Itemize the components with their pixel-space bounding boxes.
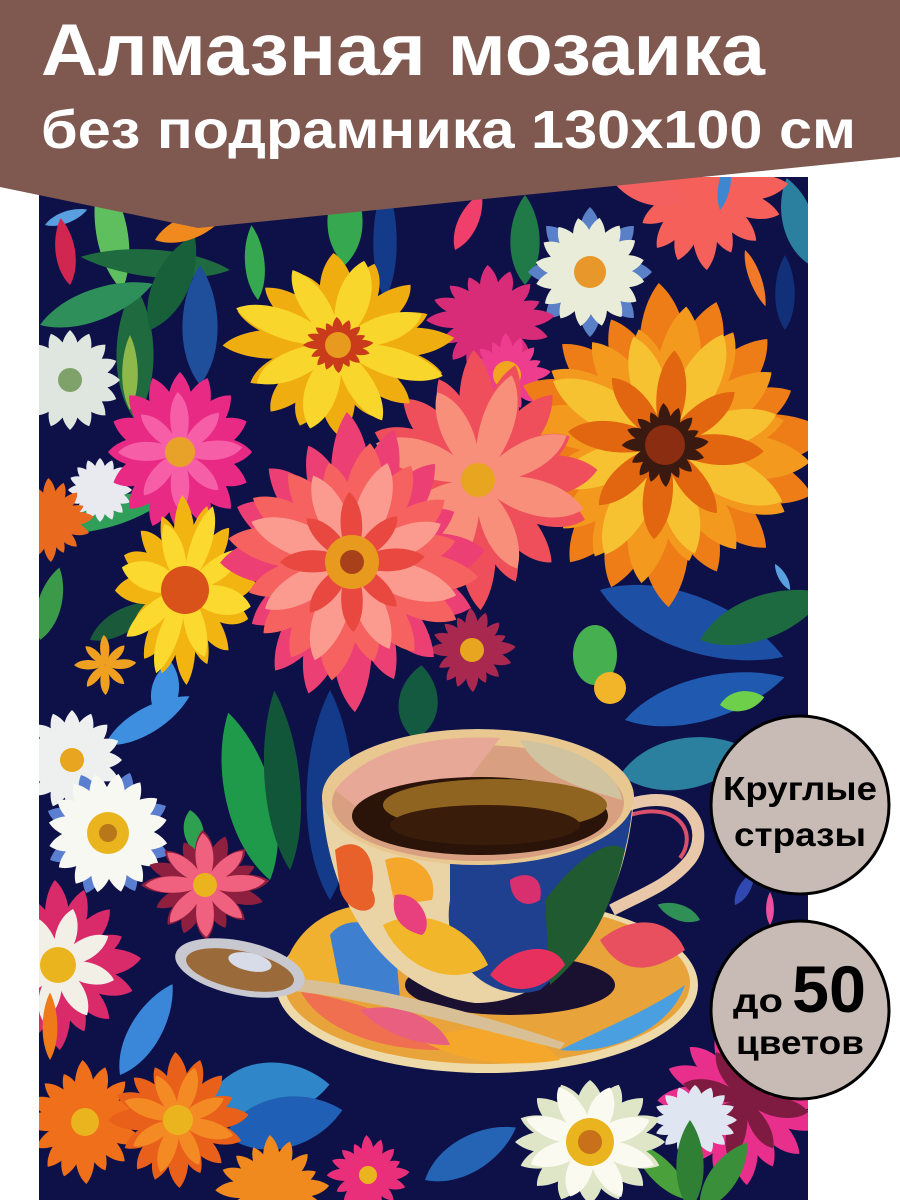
flower: magenta behind — [426, 265, 554, 362]
flower: big orange right — [523, 283, 808, 608]
flower: white top — [528, 207, 652, 337]
cup handle — [612, 800, 698, 910]
flower: white small — [68, 458, 132, 522]
cup rim — [322, 729, 634, 865]
flower: orange lower — [215, 1135, 329, 1200]
flower: white daisy with blue shading — [48, 772, 167, 894]
painting: flowers and coffee cup — [39, 177, 808, 1200]
badge: round rhinestones: Круглые — [723, 770, 877, 807]
cup body — [322, 795, 634, 1003]
saucer — [276, 897, 698, 1073]
flower: pink right bottom — [658, 1040, 808, 1185]
flower: coral top right — [616, 177, 788, 306]
flower: dark pink small — [432, 608, 516, 692]
subtitle: без подрамника 130х100 см — [41, 100, 856, 160]
flower: pink left — [108, 372, 252, 526]
flower: orange left edge — [39, 478, 94, 562]
flower: orange small left — [74, 635, 136, 695]
flower: left edge white pink — [39, 880, 141, 1060]
green leaves at bottom right — [644, 1120, 748, 1200]
flower: white large bottom — [515, 1080, 665, 1200]
coffee cup — [322, 729, 698, 1003]
flower: orange bottom left — [39, 1060, 136, 1184]
flower: magenta small — [480, 333, 550, 408]
flower: orange bottom — [108, 1052, 248, 1188]
flower: large coral centre — [220, 412, 484, 712]
flower: yellow top centre — [222, 253, 454, 434]
flower: pink bottom — [326, 1135, 410, 1200]
flower bud — [573, 625, 626, 704]
flower: white left edge — [39, 330, 120, 430]
background leaves — [29, 169, 834, 1195]
badge: up to 50 colours: цветов — [736, 1024, 864, 1061]
flower: white small right — [656, 1085, 737, 1152]
badge: up to 50 colours: 50 — [792, 952, 866, 1026]
flower: yellow left — [115, 495, 256, 685]
title: Алмазная мозаика — [41, 10, 767, 91]
flower: dark pink — [141, 830, 270, 939]
badge: up to 50 colours: до — [733, 982, 783, 1019]
badge: round rhinestones: стразы — [734, 816, 866, 853]
spoon — [170, 928, 565, 1049]
badge: round rhinestones — [711, 716, 889, 894]
flower: white daisy — [39, 710, 122, 806]
header banner — [0, 0, 900, 228]
flower: coral behind right — [374, 350, 598, 610]
coffee — [352, 777, 608, 855]
badge: up to 50 colours — [711, 921, 889, 1099]
